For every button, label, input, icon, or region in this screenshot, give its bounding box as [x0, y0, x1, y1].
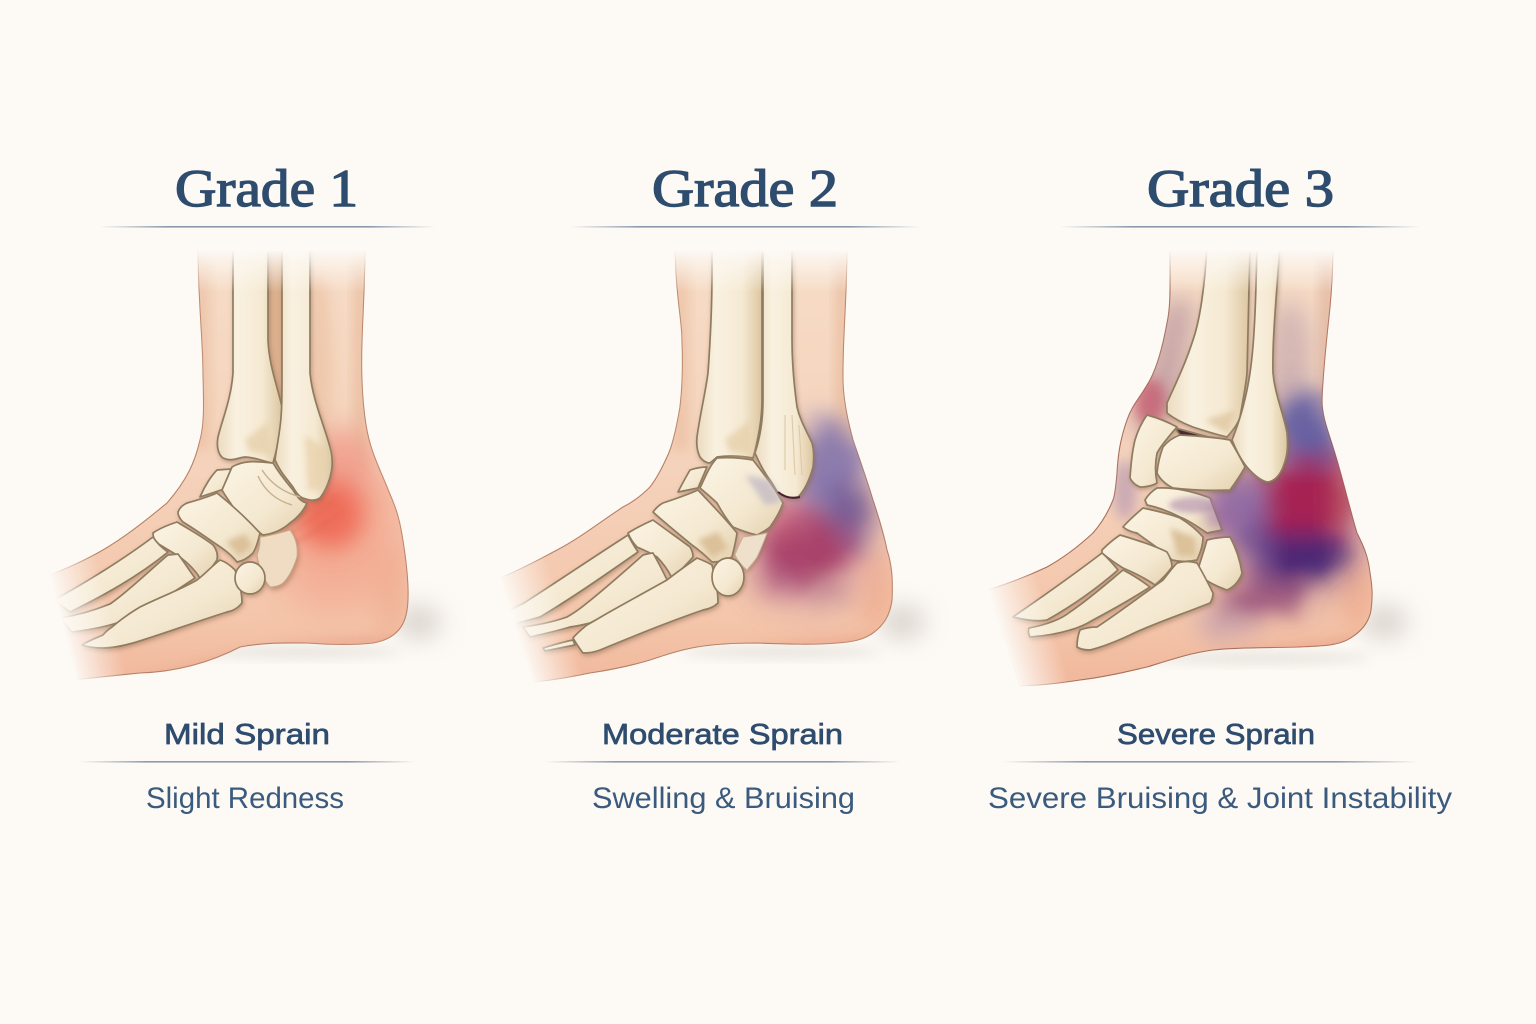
- heading: Grade 2: Grade 2: [652, 160, 838, 218]
- panel: grade 2: [500, 160, 926, 815]
- illustration: grade 2 ankle with swelling and bruising: [500, 245, 926, 685]
- heading: Grade 1: Grade 1: [175, 160, 358, 218]
- heading: Grade 3: Grade 3: [1147, 160, 1334, 218]
- description: Severe Bruising & Joint Instability: Severe Bruising & Joint Instability: [988, 782, 1452, 815]
- bones: grade 3 displaced joint: [1013, 245, 1288, 650]
- subheading: Mild Sprain: Mild Sprain: [164, 719, 330, 751]
- bones: grade 2: [506, 245, 814, 653]
- panel: grade 1: [48, 160, 442, 815]
- illustration: grade 1 ankle with slight redness: [48, 245, 442, 680]
- illustration: grade 3 ankle with severe bruising and joint instability: [988, 245, 1408, 690]
- bones: grade 1: [54, 245, 332, 648]
- subheading: Moderate Sprain: Moderate Sprain: [602, 719, 843, 751]
- subheading: Severe Sprain: Severe Sprain: [1117, 719, 1315, 751]
- description: Slight Redness: Slight Redness: [146, 782, 344, 815]
- panel: grade 3: [988, 160, 1452, 815]
- description: Swelling & Bruising: Swelling & Bruising: [592, 782, 855, 815]
